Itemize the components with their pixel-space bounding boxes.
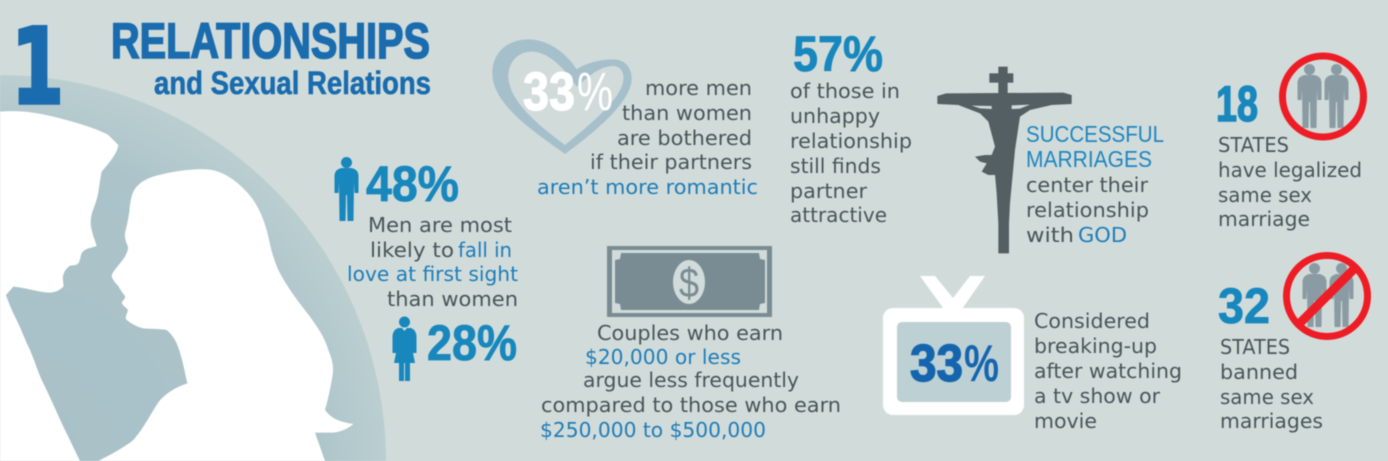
title line 1: RELATIONSHIPS — [111, 13, 430, 69]
icon: two men with prohibition sign — [1286, 256, 1368, 336]
text: men most likely: than women — [387, 287, 518, 311]
text: men most likely: likely to — [370, 238, 454, 262]
big numeral 1: 1 — [11, 6, 64, 128]
text: men most likely: fall in — [458, 238, 512, 262]
text: more men: than women — [622, 101, 752, 125]
stat: 33% in tv: % — [964, 335, 999, 393]
title line 2: and Sexual Relations — [154, 65, 431, 101]
text: successful marriages — [1026, 121, 1164, 247]
text: states legalized: marriage — [1218, 207, 1310, 231]
text: more men: aren’t more romantic — [537, 175, 758, 199]
text: considered breaking up: movie — [1034, 409, 1097, 433]
silhouette: woman — [98, 169, 353, 461]
text: couples who earn: compared to those who earn — [541, 393, 841, 417]
icon: dollar bill: $ — [679, 259, 699, 306]
text: couples who earn: $20,000 or less — [585, 345, 741, 369]
panel: 57% attractive — [790, 26, 912, 227]
large circle backdrop — [0, 75, 386, 461]
text: men most likely: love at first sight — [347, 262, 518, 286]
icon: television — [883, 276, 1024, 415]
text: states legalized: same sex — [1218, 183, 1312, 207]
text: successful marriages: relationship — [1026, 198, 1149, 222]
text: considered breaking up: after watching — [1034, 359, 1182, 383]
stat: 18: 18 — [1216, 76, 1258, 132]
text: considered breaking up: breaking-up — [1034, 334, 1157, 358]
text: unhappy relationship: partner — [790, 179, 868, 203]
text: states legalized: have legalized — [1218, 158, 1362, 182]
text: unhappy relationship: unhappy — [790, 104, 880, 128]
text: states banned: same sex — [1220, 385, 1314, 409]
icon: two men in red circle — [1282, 56, 1364, 137]
stat: 33% in heart: % — [577, 62, 613, 122]
icon: woman — [392, 316, 416, 381]
silhouette: man — [0, 111, 118, 461]
text: more men: if their partners — [590, 150, 752, 174]
text: successful marriages: GOD — [1078, 223, 1127, 247]
text: couples who earn: argue less frequently — [583, 368, 799, 392]
text: states banned — [1220, 335, 1323, 433]
text: unhappy relationship: of those in — [790, 79, 900, 103]
text: states legalized — [1218, 133, 1362, 231]
title — [111, 13, 431, 101]
text: couples who earn — [540, 321, 841, 442]
text: states banned: STATES — [1220, 335, 1290, 359]
text: couples who earn: $250,000 to $500,000 — [540, 418, 766, 442]
text: considered breaking up: a tv show or — [1034, 384, 1161, 408]
text: states banned: marriages — [1220, 409, 1323, 433]
panel: tv — [883, 276, 1182, 433]
stat: 33% in heart — [523, 62, 613, 122]
icon: crucifix — [937, 67, 1072, 253]
text: considered breaking up — [1034, 309, 1182, 433]
icon: heart — [492, 39, 632, 154]
text: more men: are bothered — [617, 126, 752, 150]
stat: 33% in tv: 33 — [910, 335, 963, 393]
panel: 32 states — [1218, 256, 1368, 433]
text: successful marriages: MARRIAGES — [1026, 146, 1152, 172]
stat: 33% in tv — [910, 335, 999, 393]
text: unhappy relationship: still finds — [790, 154, 881, 178]
text: couples who earn: Couples who earn — [597, 321, 783, 345]
icon: man — [334, 157, 358, 221]
stat: 32: 32 — [1218, 278, 1270, 334]
text: successful marriages: center their — [1026, 173, 1149, 197]
text: unhappy relationship: attractive — [790, 203, 887, 227]
text: unhappy relationship: relationship — [790, 129, 912, 153]
stat: 57%: 57% — [793, 26, 883, 82]
text: states banned: banned — [1220, 360, 1298, 384]
panel: romance — [492, 39, 758, 199]
text: more men — [537, 76, 758, 199]
text: considered breaking up: Considered — [1034, 309, 1150, 333]
panel: successful marriages — [937, 67, 1164, 253]
text: more men: more men — [645, 76, 752, 100]
text: men most likely: Men are most — [368, 213, 512, 237]
text: men most likely — [347, 213, 518, 311]
stat: 48%: 48% — [366, 156, 459, 212]
panel: couple silhouette — [0, 75, 386, 461]
stat: 28%: 28% — [427, 315, 517, 371]
text: states legalized: STATES — [1218, 133, 1289, 157]
stat: 33% in heart: 33 — [523, 62, 575, 122]
panel: 18 states — [1216, 56, 1364, 231]
text: unhappy relationship — [790, 79, 912, 227]
panel: income — [540, 246, 841, 442]
text: successful marriages: SUCCESSFUL — [1026, 121, 1164, 147]
panel: love at first sight — [334, 156, 518, 381]
text: successful marriages: with — [1026, 223, 1074, 247]
icon: dollar bill — [607, 246, 772, 317]
